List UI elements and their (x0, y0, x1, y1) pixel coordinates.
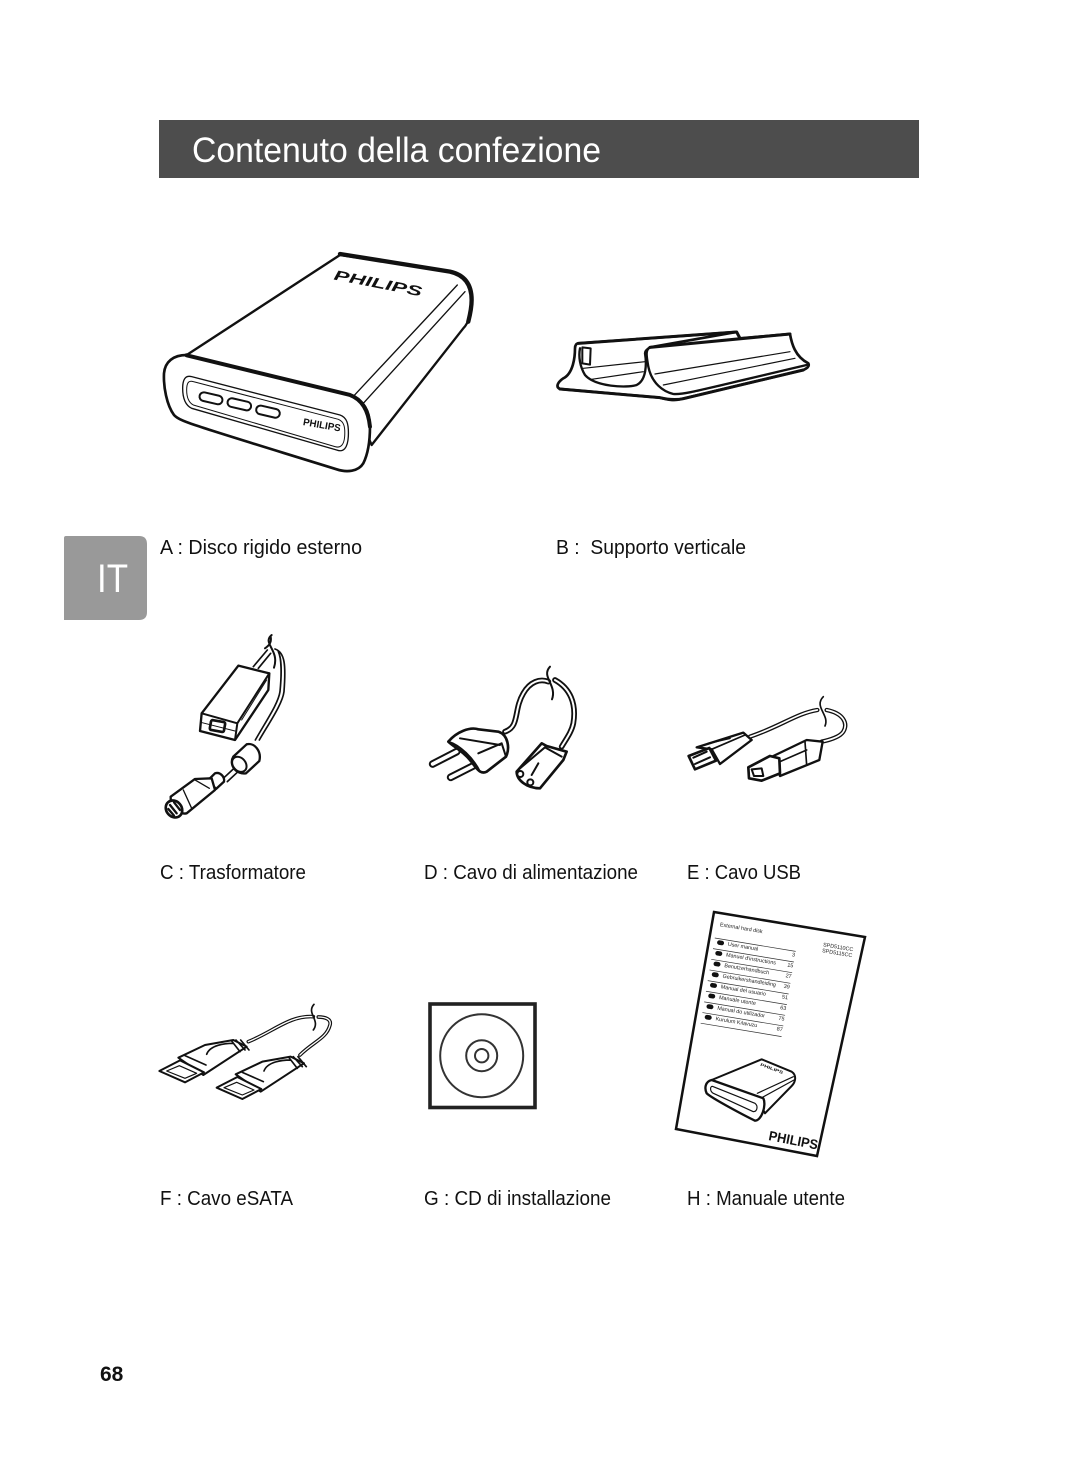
page number: 68 (100, 1363, 124, 1386)
icon: USB cable (E) (689, 697, 845, 781)
manual contents list: 27 (785, 973, 792, 980)
label D: D : Cavo di alimentazione (424, 862, 638, 884)
manual cover drive illustration (705, 1059, 795, 1121)
manual contents list: 3 (791, 952, 795, 959)
manual contents list: Gebruikershandleiding (722, 974, 776, 988)
manual contents list: 75 (778, 1016, 785, 1023)
title banner (159, 120, 919, 178)
manual Philips logo: PHILIPS (767, 1128, 819, 1152)
icon: power adapter (C) (162, 635, 285, 821)
label H: H : Manuale utente (687, 1188, 845, 1210)
label F: F : Cavo eSATA (160, 1188, 294, 1210)
label E: E : Cavo USB (687, 862, 801, 884)
language tab: IT (97, 557, 128, 601)
label C: C : Trasformatore (160, 862, 306, 884)
manual contents list: Manuel d'instructions (726, 952, 777, 967)
manual contents list: SPD5110CC (823, 942, 854, 953)
manual contents list (701, 922, 854, 1046)
manual contents list: Manual do utilizador (717, 1006, 766, 1020)
label B: B : Supporto verticale (556, 537, 746, 559)
manual contents list: External hard disk (719, 922, 763, 935)
manual contents list: Benutzerhandbuch (724, 963, 769, 976)
label A: A : Disco rigido esterno (160, 537, 362, 559)
icon: external hard disk (A) (164, 254, 472, 471)
icon: vertical stand (B) (558, 332, 809, 400)
manual contents list: Manuale utente (719, 995, 756, 1007)
icon: installation CD (G) (430, 1004, 535, 1108)
title banner: Contenuto della confezione (192, 131, 601, 170)
icon: eSATA cable (F) (159, 1004, 330, 1099)
manual contents list: SPD5115CC (822, 948, 853, 959)
language tab (64, 536, 147, 620)
manual cover drive illustration: PHILIPS (760, 1062, 784, 1075)
manual contents list: 15 (787, 963, 794, 969)
manual contents list: 63 (780, 1005, 787, 1012)
icon: external hard disk (A): PHILIPS (333, 267, 425, 300)
icon: user manual (H) (676, 912, 865, 1156)
icon: power cord (D) (433, 667, 574, 788)
icon: external hard disk (A): PHILIPS (302, 417, 342, 435)
manual contents list: User manual (727, 942, 758, 953)
manual contents list: Kurulum Kılavuzu (715, 1016, 758, 1029)
manual contents list: Manual del usuario (720, 984, 766, 998)
manual contents list: 87 (776, 1026, 783, 1033)
manual contents list: 51 (781, 994, 788, 1001)
label G: G : CD di installazione (424, 1188, 611, 1210)
manual contents list: 39 (783, 984, 790, 991)
